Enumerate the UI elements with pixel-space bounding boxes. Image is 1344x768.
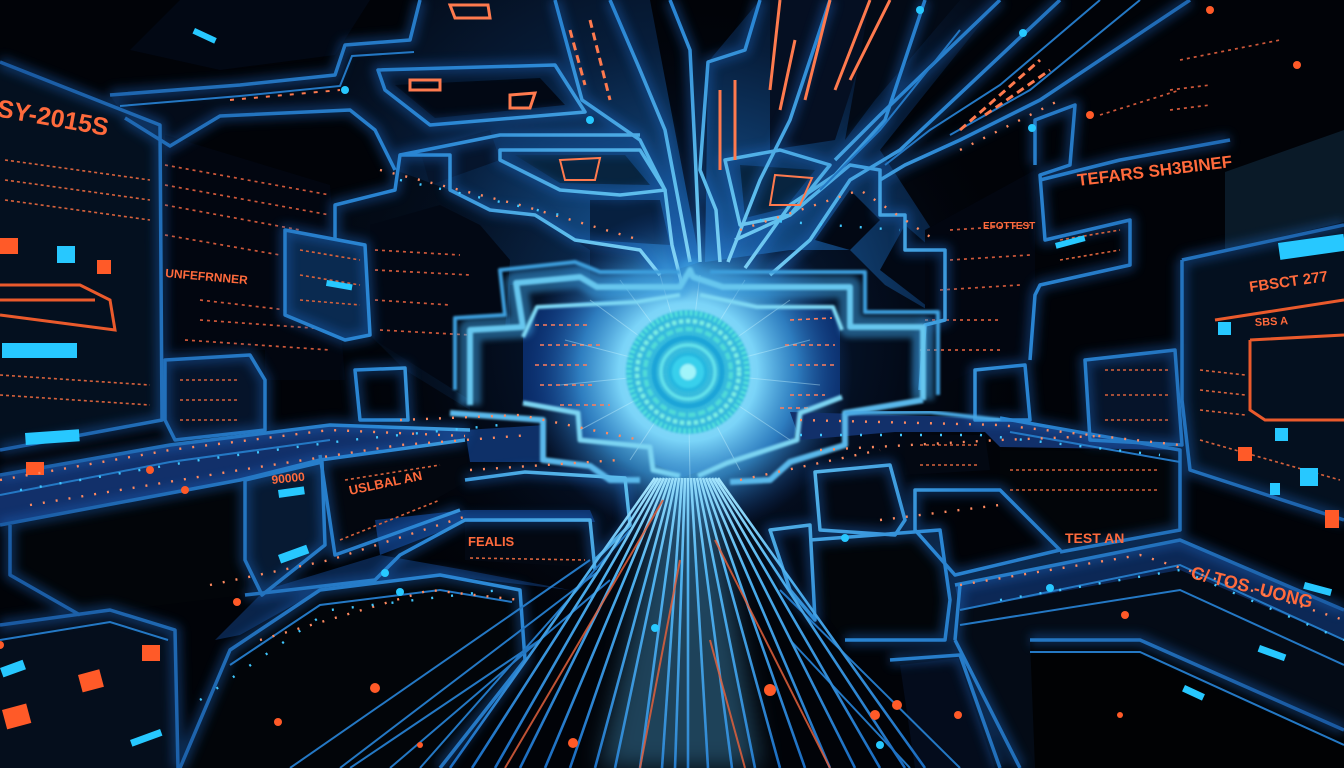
glow rays <box>560 275 820 478</box>
chamber data rows <box>535 318 835 408</box>
label: right block: TEST AN <box>1065 530 1124 546</box>
label: right panel: FBSCT 277 <box>1248 268 1329 296</box>
orange floor traces <box>505 500 830 768</box>
floor ray glow <box>600 475 760 768</box>
label: small right panel: SBS A <box>1255 315 1288 329</box>
label: small left block: 90000 <box>271 470 306 487</box>
label: left wall: UNFEFRNNER <box>165 266 249 287</box>
central chamber and glow <box>523 207 853 537</box>
back walls <box>165 130 1344 395</box>
labels <box>0 95 1329 612</box>
ceiling accents <box>230 0 1050 205</box>
ceiling plates <box>110 0 1000 410</box>
panel accents <box>0 285 1344 420</box>
back wall data rows <box>165 40 1280 350</box>
floor rays <box>450 478 925 768</box>
panel data rows <box>0 160 1340 560</box>
label: right tower: TEFARS SH3BINEF <box>1076 152 1233 190</box>
label: back wall: EFOTTEST <box>983 221 1035 232</box>
stepped ring around core <box>450 262 1000 482</box>
label: centre-left block: FEALIS <box>468 534 515 549</box>
label: lower right: C/ TOS -UONG <box>1189 562 1315 612</box>
floor block tops <box>0 412 1344 640</box>
label: left block: USLBAL AN <box>348 468 423 498</box>
speckle lights on floor blocks <box>0 100 1344 640</box>
core: concentric rings <box>626 310 750 434</box>
ceiling dark voids <box>130 0 960 400</box>
